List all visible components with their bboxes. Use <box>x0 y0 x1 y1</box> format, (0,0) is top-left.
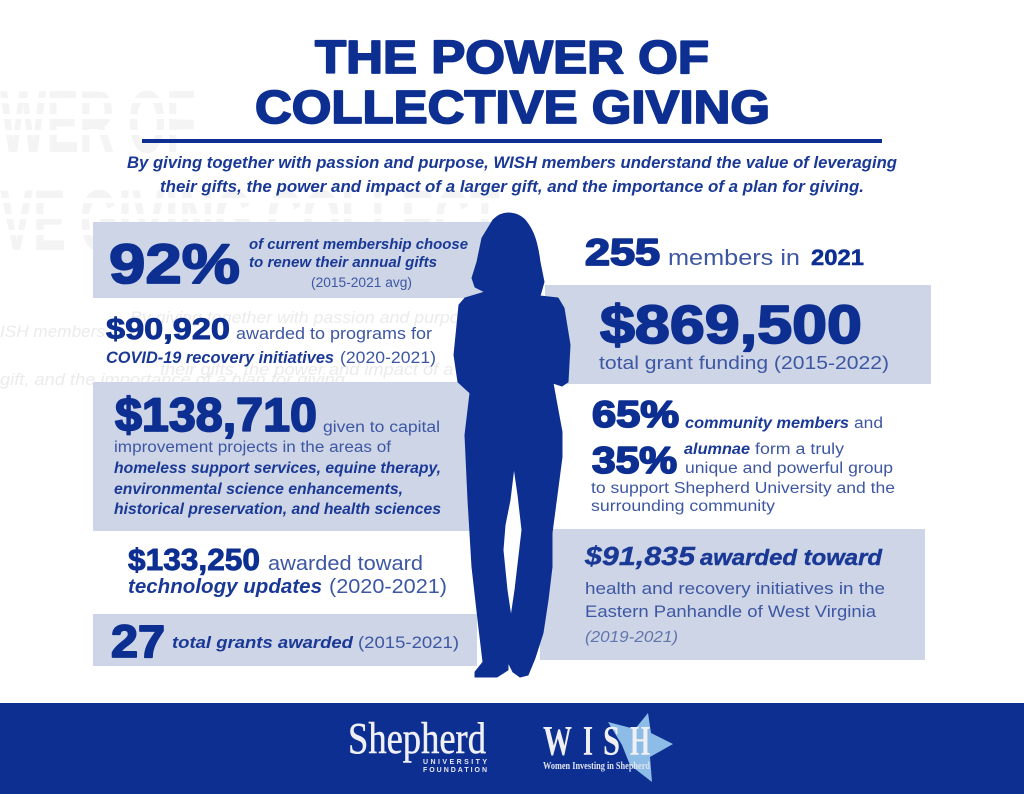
panel: total grant funding <box>545 285 931 384</box>
stat: $138,710 capital improvement <box>114 388 441 518</box>
logo: Shepherd University Foundation: Shepherd <box>348 714 486 763</box>
stat: $133,250 technology: awarded toward <box>268 553 423 575</box>
stat: $90,920 COVID-19: (2020-2021) <box>340 348 436 367</box>
panel: total grants <box>93 614 477 666</box>
stat: $91,835 health: $91,835 <box>584 541 696 571</box>
stat: 27 grants <box>111 616 459 667</box>
ghost background text: ISH members <box>0 322 105 341</box>
stat: $138,710 capital improvement: $138,710 <box>115 388 317 441</box>
stat: 65% and 35%: community members <box>685 415 849 432</box>
stat: $133,250 technology <box>128 542 447 598</box>
logo: WISH with star: Women Investing in Shepherd <box>543 761 650 772</box>
intro text: their gifts, the power and impact of a larger gift, and the importance of a plan for giving. <box>160 178 864 196</box>
stat: 65% and 35% <box>591 394 895 515</box>
title: THE POWER OF <box>315 31 709 83</box>
stat: 65% and 35%: 65% <box>592 394 679 435</box>
stat: $90,920 COVID-19: COVID-19 recovery initiatives <box>106 349 334 367</box>
stat: 255 members: members in <box>668 245 800 270</box>
stat: $91,835 health: health and recovery initiatives in the <box>585 580 885 598</box>
stat: 255 members <box>585 232 864 273</box>
stat: $869,500 funding: total grant funding (2015-2022) <box>599 353 889 373</box>
panel: membership renewal <box>93 222 493 298</box>
stat: 92% renewal: 92% <box>109 232 240 295</box>
stat: 92% renewal: of current membership choose <box>249 237 468 253</box>
stat: $133,250 technology: $133,250 <box>128 542 260 577</box>
stat: 65% and 35%: surrounding community <box>591 498 775 515</box>
logo: WISH with star: S <box>603 719 620 765</box>
logo: Shepherd University Foundation: FOUNDATION <box>423 767 487 774</box>
ghost background text: VE GIVING COLLECT <box>0 173 500 269</box>
stat: $138,710 capital improvement: given to capital <box>323 419 440 436</box>
stat: $91,835 health <box>584 541 885 646</box>
ghost background text <box>0 72 510 389</box>
logo: WISH with star <box>543 713 673 782</box>
stat: $138,710 capital improvement: improvement projects in the areas of <box>114 439 392 456</box>
title: COLLECTIVE GIVING <box>255 81 770 133</box>
footer band <box>0 703 1024 794</box>
panel: capital improvement <box>93 382 473 531</box>
stat: $91,835 health: (2019-2021) <box>585 629 678 646</box>
stat: $133,250 technology: technology updates <box>128 576 322 598</box>
stat: $91,835 health: Eastern Panhandle of West Virginia <box>585 603 877 621</box>
stat: $90,920 COVID-19: awarded to programs for <box>236 324 432 343</box>
stat: 92% renewal <box>109 232 468 295</box>
stat: $90,920 COVID-19 <box>106 313 436 367</box>
stat: $138,710 capital improvement: environmental science enhancements, <box>114 481 403 498</box>
stat: 255 members: 255 <box>585 232 660 273</box>
stat: $90,920 COVID-19: $90,920 <box>106 313 230 346</box>
stat: 65% and 35%: to support Shepherd University and the <box>591 480 895 497</box>
stat: 27 grants: (2015-2021) <box>358 633 459 652</box>
ghost background text: By giving together with passion and purpose, W <box>130 308 507 327</box>
ghost background text: their gifts, the power and impact of a larger <box>160 360 506 379</box>
stat: 27 grants: 27 <box>111 616 165 667</box>
logo: WISH with star: H <box>630 719 650 765</box>
stat: 65% and 35%: unique and powerful group <box>685 460 893 477</box>
ghost background text: gift, and the importance of a plan for giving. <box>0 370 350 389</box>
ghost background text: WER OF <box>0 72 196 171</box>
stat: $869,500 funding <box>599 295 889 373</box>
stat: $133,250 technology: (2020-2021) <box>329 576 447 598</box>
stat: 65% and 35%: and <box>854 415 883 432</box>
stat: 92% renewal: to renew their annual gifts <box>249 255 437 271</box>
intro text <box>127 154 897 196</box>
stat: $869,500 funding: $869,500 <box>600 295 862 355</box>
stat: 92% renewal: (2015-2021 avg) <box>311 275 412 290</box>
stat: $138,710 capital improvement: historical preservation, and health sciences <box>114 501 441 518</box>
stat: 65% and 35%: form a truly <box>755 441 844 458</box>
stat: $138,710 capital improvement: homeless support services, equine therapy, <box>114 460 441 477</box>
stat: $91,835 health: awarded toward <box>700 545 883 570</box>
logo: Shepherd University Foundation: UNIVERSITY <box>423 759 487 766</box>
title rule <box>142 139 882 143</box>
stat: 27 grants: total grants awarded <box>172 633 354 652</box>
intro text: By giving together with passion and purpose, WISH members understand the value of leveraging <box>127 154 897 172</box>
logo: WISH with star: W <box>543 719 572 765</box>
title <box>255 31 770 133</box>
panel: health and recovery <box>540 529 925 660</box>
stat: 255 members: 2021 <box>811 245 864 270</box>
stat: 65% and 35%: 35% <box>592 440 677 481</box>
stat: 65% and 35%: alumnae <box>684 441 750 458</box>
woman silhouette <box>454 213 570 677</box>
logo: WISH with star: I <box>583 719 593 765</box>
